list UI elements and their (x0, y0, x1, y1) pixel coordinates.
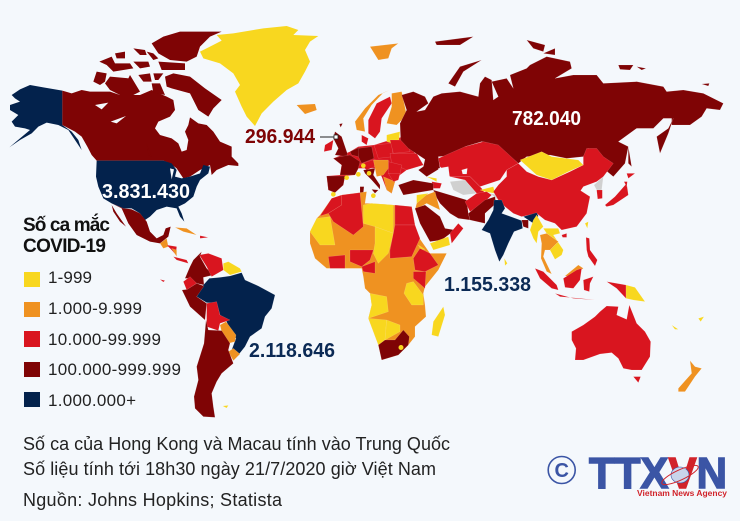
China (493, 148, 613, 230)
Iceland (297, 104, 317, 114)
copyright symbol (548, 456, 575, 484)
Papua New Guinea (626, 285, 645, 302)
label: Russia cases: 782.040 (512, 108, 581, 130)
legend item: 1.000.000+: 1.000.000+ (48, 391, 136, 410)
Myanmar (530, 215, 543, 243)
callout line: United Kingdom (320, 135, 338, 139)
Korea (594, 177, 603, 190)
United States (96, 161, 210, 222)
Africa (310, 192, 447, 360)
Canada (62, 32, 238, 178)
Greenland (200, 26, 318, 126)
Afghanistan (465, 192, 492, 212)
Lesotho (398, 345, 404, 350)
Colombia (185, 252, 213, 285)
logo: TTXVN: TTXVN (589, 449, 727, 498)
Central and South America (160, 227, 275, 417)
footnote text: Số ca của Hong Kong và Macau tính vào Trung Quốc (23, 434, 450, 454)
legend title: Số ca mắc (23, 214, 110, 236)
Kazakhstan and Central Asia (438, 142, 518, 187)
New Zealand (678, 361, 702, 392)
Europe (324, 90, 423, 193)
Mexico (112, 203, 171, 243)
North America (9, 26, 318, 243)
United Kingdom (333, 132, 347, 157)
Oman (450, 223, 463, 243)
Guianas (223, 262, 242, 275)
Yemen (430, 237, 450, 250)
legend item: 1-999: 1-999 (48, 268, 92, 287)
Asia (370, 37, 723, 250)
legend item: 10.000-99.999: 10.000-99.999 (48, 330, 161, 349)
Italy (363, 168, 380, 189)
Ecuador (183, 277, 197, 290)
label: Brazil cases: 2.118.646 (249, 340, 335, 362)
Russia (400, 57, 723, 177)
France (333, 155, 360, 175)
logo: TTXVN: Vietnam News Agency (637, 488, 727, 498)
Iraq and Jordan (415, 192, 440, 210)
Indonesia (535, 268, 626, 300)
Madagascar (432, 307, 445, 337)
Peru (182, 283, 207, 320)
Australia (572, 305, 651, 370)
Saudi Arabia (415, 205, 455, 242)
Bolivia (207, 302, 230, 331)
Indochina (543, 228, 563, 259)
Europe microstates and small islands (331, 163, 376, 198)
Turkmenistan (450, 180, 477, 195)
Falkland Islands (223, 405, 228, 408)
legend item: 1.000-9.999: 1.000-9.999 (48, 299, 142, 318)
Argentina and Chile (194, 320, 233, 417)
legend item: 100.000-999.999: 100.000-999.999 (48, 360, 181, 379)
world map (9, 26, 723, 417)
source: Nguồn: Johns Hopkins; Statista (23, 490, 283, 510)
label: India cases: 1.155.338 (444, 274, 531, 296)
South Africa (378, 330, 409, 360)
label: United Kingdom cases: 296.944 (245, 126, 316, 148)
Paraguay (220, 322, 236, 343)
Mongolia (520, 152, 583, 180)
Turkey (398, 180, 433, 195)
Brazil (197, 273, 275, 355)
footnote text: Số liệu tính tới 18h30 ngày 21/7/2020 giờ Việt Nam (23, 459, 436, 479)
Germany (358, 147, 374, 163)
Philippines (586, 237, 597, 266)
Venezuela (199, 253, 223, 277)
South Asia, Southeast Asia and Oceania (432, 200, 704, 392)
Uruguay (228, 348, 240, 361)
India (482, 200, 523, 262)
label: United States cases: 3.831.430 (102, 181, 190, 203)
Alaska (9, 85, 82, 150)
Svalbard (370, 43, 398, 60)
copyright symbol: C (554, 460, 569, 482)
Spain (327, 176, 345, 193)
Pakistan (468, 197, 496, 223)
legend item: 1-999 (24, 268, 92, 287)
legend title: COVID-19 (23, 236, 106, 257)
footnote text (23, 434, 450, 510)
Africa base (310, 192, 447, 360)
Malaysia (565, 265, 583, 276)
legend (23, 214, 181, 410)
Japan (605, 183, 628, 207)
Iran (433, 190, 470, 220)
